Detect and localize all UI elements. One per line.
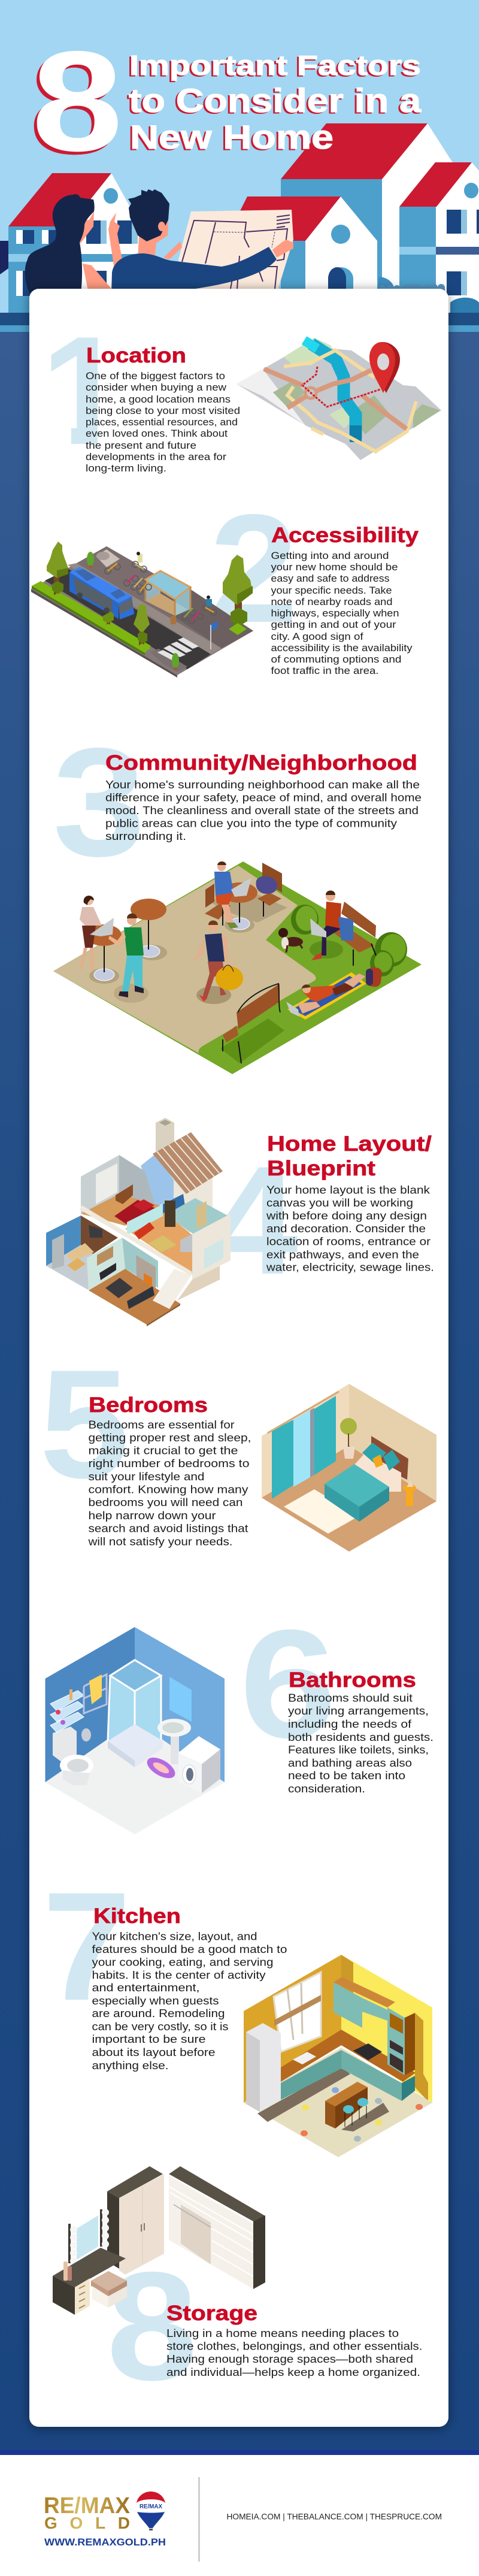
body text: Bedrooms are essential for: [89, 1419, 235, 1431]
illustration: street with bus and shelter: [31, 542, 253, 678]
body text: and entertainment,: [92, 1982, 200, 1994]
seated man with laptop: [214, 861, 251, 929]
section 7: kitchen: [43, 1860, 432, 2157]
body text: are around. Remodeling: [92, 2007, 225, 2019]
body text: comfort. Knowing how many: [89, 1483, 248, 1495]
body text: consideration.: [288, 1783, 365, 1795]
body text: home, a good location means: [86, 394, 231, 405]
illustration: closet and vanity: [53, 2166, 265, 2315]
body text: Living in a home means needing places to: [166, 2327, 399, 2339]
illustration: bathroom: [46, 1627, 225, 1834]
number 4: 4: [211, 1133, 299, 1307]
number 8: 8: [107, 2239, 198, 2412]
body text: public areas can clue you into the type of community: [105, 817, 397, 829]
illustration: park with people: [53, 861, 422, 1074]
body text: Your home's surrounding neighborhood can make all the: [105, 779, 420, 791]
body text: [86, 370, 240, 474]
body text: both residents and guests.: [288, 1731, 433, 1743]
number 7: 7: [43, 1860, 131, 2033]
body text: the present and future: [86, 440, 196, 451]
body text: city. A good sign of: [271, 631, 363, 642]
illustration: cutaway house: [46, 1118, 231, 1326]
card panel: [29, 289, 448, 2427]
body text: long-term living.: [86, 462, 166, 474]
body text: highways, especially when: [271, 607, 399, 619]
body text: store clothes, belongings, and other essentials.: [166, 2340, 423, 2352]
title: Important Factors to Consider in a New Home: Important Factors: [129, 50, 421, 81]
body text: accessibility is the availability: [271, 642, 413, 654]
body text: Getting into and around: [271, 550, 389, 561]
icon: balloon: [136, 2492, 166, 2530]
body text: search and avoid listings that: [89, 1523, 248, 1535]
heading: Bathrooms: [289, 1668, 416, 1692]
body text: important to be sure: [92, 2033, 206, 2045]
heading: Community/Neighborhood: [105, 751, 417, 775]
body text: difference in your safety, peace of mind, and overall home: [105, 792, 422, 804]
footer: logo: RE/MAX: [44, 2493, 131, 2518]
dog: [278, 928, 303, 953]
standing man in green: [108, 914, 148, 1003]
body text: making it crucial to get the: [89, 1445, 238, 1457]
number 6: 6: [240, 1597, 336, 1770]
footer: logo: GOLD: [44, 2514, 130, 2532]
bench bottom: [220, 984, 284, 1063]
heading: Accessibility: [271, 524, 419, 547]
body text: habits. It is the center of activity: [92, 1969, 266, 1981]
title: Important Factors to Consider in a New Home: to Consider in a: [129, 81, 422, 119]
body text: getting in and out of your: [271, 619, 396, 630]
body text: Features like toilets, sinks,: [288, 1744, 429, 1756]
body text: and decoration. Consider the: [266, 1223, 426, 1235]
illustration: folded map with pin: [237, 338, 441, 460]
man: [111, 189, 293, 294]
body text: being close to your most visited: [86, 405, 240, 416]
person on towel: [286, 966, 383, 1020]
body text: consider when buying a new: [86, 382, 227, 393]
illustration: couple reading a blueprint: [25, 189, 293, 294]
heading: Home Layout/: [267, 1132, 432, 1156]
bench with man and laptop: [310, 890, 376, 966]
section 5: bedrooms: [40, 1337, 436, 1552]
number 1: 1: [41, 304, 127, 477]
body text: need to be taken into: [288, 1770, 405, 1782]
bushes: [291, 905, 407, 976]
title: Important Factors to Consider in a New Home: Important Factors: [128, 51, 419, 82]
body text: suit your lifestyle and: [89, 1471, 205, 1483]
body text: features should be a good match to: [92, 1943, 287, 1955]
body text: your living arrangements,: [288, 1705, 429, 1717]
number 2: 2: [210, 482, 298, 655]
body text: and bathing areas also: [288, 1757, 412, 1769]
body text: can be very costly, so it is: [92, 2021, 229, 2033]
body text: surrounding it.: [105, 830, 186, 842]
body text: One of the biggest factors to: [86, 370, 225, 382]
crosswalk: [157, 637, 199, 661]
footer divider: [198, 2477, 200, 2562]
body text: foot traffic in the area.: [271, 665, 378, 676]
heading: Location: [86, 344, 186, 367]
title: Important Factors to Consider in a New Home: [127, 50, 422, 157]
body text: especially when guests: [92, 1995, 219, 2007]
section 2: accessibility: [31, 482, 419, 678]
section 8: storage: [53, 2166, 423, 2412]
title: big number 8: 8: [32, 22, 123, 181]
body text: your cooking, eating, and serving: [92, 1957, 273, 1969]
body text: note of nearby roads and: [271, 596, 393, 607]
body text: even loved ones. Think about: [86, 428, 228, 439]
body text: Your kitchen's size, layout, and: [92, 1930, 257, 1942]
blueprint sheet: [178, 210, 293, 294]
body text: anything else.: [92, 2060, 169, 2072]
trees: [47, 542, 253, 670]
body text: about its layout before: [92, 2046, 216, 2058]
number 5: 5: [40, 1337, 129, 1510]
body text: places, essential resources, and: [86, 416, 238, 428]
heading: Bedrooms: [89, 1393, 208, 1417]
body text: [271, 550, 413, 676]
title: Important Factors to Consider in a New Home: to Consider in a: [127, 83, 420, 120]
woman: [25, 194, 122, 294]
body text: water, electricity, sewage lines.: [266, 1262, 434, 1274]
illustration: row of houses: [0, 123, 479, 313]
section 4: home layout: [46, 1118, 434, 1326]
body text: easy and safe to address: [271, 573, 389, 584]
body text: with before doing any design: [266, 1210, 427, 1222]
heading: Blueprint: [267, 1157, 375, 1180]
body text: and individual—helps keep a home organized.: [166, 2366, 420, 2378]
heading: Kitchen: [93, 1904, 181, 1928]
body text: developments in the area for: [86, 451, 226, 462]
icon: balloon: RE/MAX: [140, 2504, 162, 2510]
body text: Your home layout is the blank: [266, 1184, 431, 1196]
body text: location of rooms, entrance or: [266, 1235, 431, 1247]
body text: your specific needs. Take: [271, 585, 392, 596]
body text: including the needs of: [288, 1718, 412, 1730]
body text: of commuting options and: [271, 654, 401, 665]
body text: [87, 1419, 251, 1548]
body text: getting proper rest and sleep,: [89, 1432, 251, 1444]
illustration: bedroom: [262, 1384, 436, 1552]
walking man: [193, 920, 243, 1004]
bus: [69, 567, 134, 619]
heading: [267, 1132, 432, 1180]
section 6: bathrooms: [46, 1597, 433, 1834]
body text: canvas you will be working: [266, 1197, 413, 1209]
footer: logo: [44, 2492, 166, 2548]
title: Important Factors to Consider in a New Home: New Home: [128, 119, 332, 157]
illustration: kitchen: [244, 1955, 432, 2157]
body text: will not satisfy your needs.: [87, 1536, 232, 1548]
map pin: [369, 342, 400, 393]
bicycles: [105, 561, 217, 624]
body text: right number of bedrooms to: [89, 1458, 249, 1470]
title: Important Factors to Consider in a New Home: New Home: [130, 118, 334, 156]
standing woman: [80, 896, 114, 969]
body text: help narrow down your: [89, 1510, 216, 1522]
body text: [288, 1692, 433, 1795]
body text: [266, 1184, 434, 1274]
body text: [166, 2327, 423, 2378]
body text: bedrooms you will need can: [89, 1496, 243, 1508]
heading: Storage: [166, 2302, 257, 2325]
footer: sources: HOMEIA.COM | THEBALANCE.COM | THESPRUCE.COM: [226, 2511, 442, 2521]
body text: exit pathways, and even the: [266, 1248, 419, 1260]
body text: [105, 779, 422, 842]
section 3: community: [53, 715, 422, 1074]
title: big number 8: 8: [29, 25, 120, 184]
body text: [92, 1930, 287, 2072]
tables: [86, 882, 257, 984]
body text: mood. The cleanliness and overall state of the streets and: [105, 805, 419, 817]
vent: [96, 549, 120, 567]
website: WWW.REMAXGOLD.PH: [44, 2536, 166, 2548]
body text: Having enough storage spaces—both shared: [166, 2353, 413, 2365]
shelter: [145, 571, 190, 616]
sign: [211, 621, 217, 649]
section 1: location: [51, 336, 441, 473]
number 3: 3: [53, 715, 145, 888]
bench at top: [205, 863, 282, 926]
body text: your new home should be: [271, 561, 398, 573]
body text: Bathrooms should suit: [288, 1692, 413, 1704]
